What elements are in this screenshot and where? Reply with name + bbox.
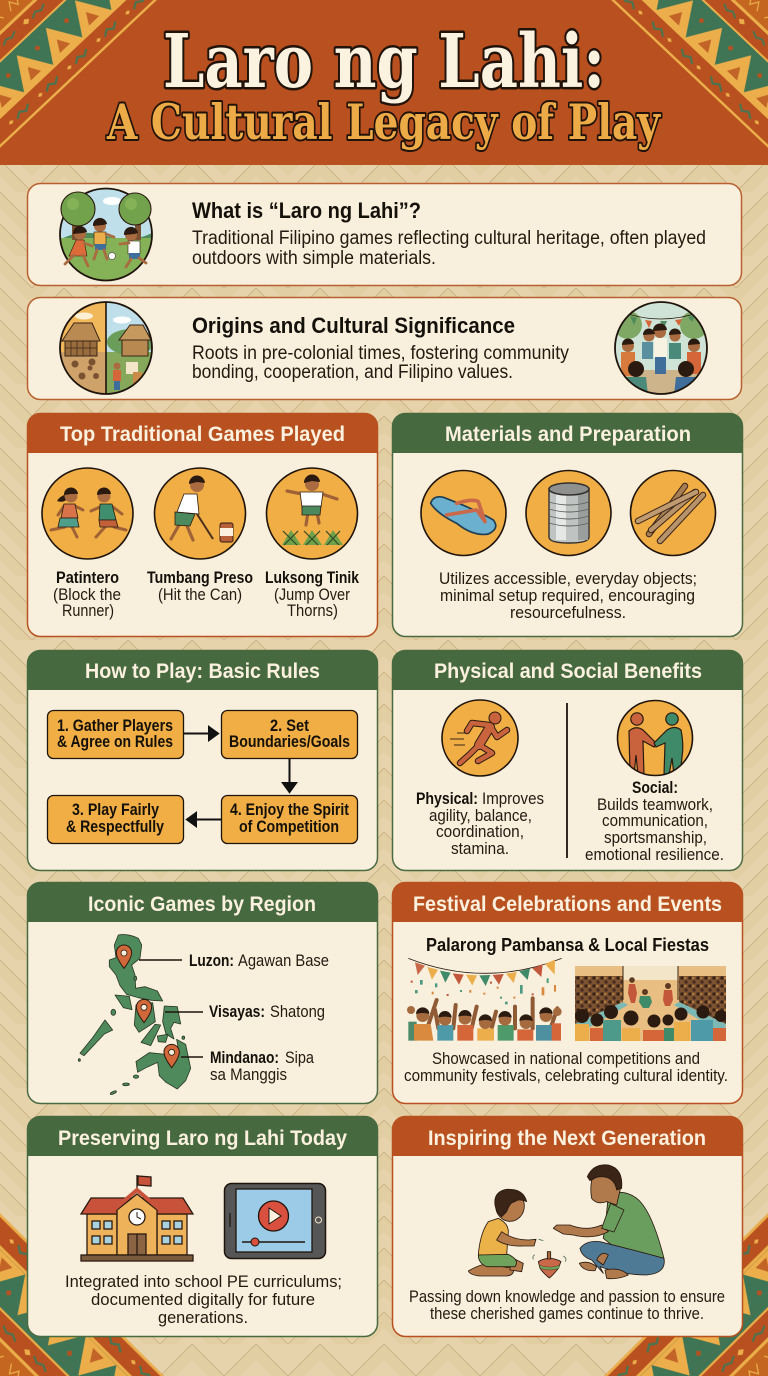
social benefits text bbox=[585, 779, 724, 864]
arrow: step 4 to 3 bbox=[187, 813, 221, 826]
social benefits text: sportsmanship, bbox=[604, 829, 707, 847]
body text: minimal setup required, encouraging bbox=[440, 587, 695, 605]
card: What is Laro ng Lahi bbox=[28, 184, 742, 286]
step 1: & Agree on Rules bbox=[57, 733, 173, 751]
body text bbox=[192, 343, 569, 383]
icon: sticks bbox=[630, 470, 716, 556]
top-right tribal corner bbox=[611, 0, 768, 148]
panel: iconic games by region bbox=[27, 882, 378, 1104]
panel: top traditional games bbox=[27, 413, 378, 636]
label: Mindanao: Mindanao: bbox=[210, 1049, 279, 1067]
label: Visayas: Visayas: bbox=[209, 1003, 265, 1021]
body text: Integrated into school PE curriculums; bbox=[65, 1273, 342, 1291]
subheading: Palarong Pambansa & Local Fiestas bbox=[426, 934, 709, 955]
panel heading: Materials and Preparation bbox=[445, 423, 691, 446]
physical benefits text: Physical: bbox=[416, 790, 478, 808]
panel heading: Inspiring the Next Generation bbox=[428, 1127, 706, 1150]
heading: Origins and Cultural Significance bbox=[192, 313, 515, 338]
body text: these cherished games continue to thrive. bbox=[430, 1305, 704, 1323]
panel: materials and preparation bbox=[392, 413, 743, 636]
step 2 bbox=[222, 710, 358, 758]
icon: village past and present bbox=[60, 302, 155, 394]
step 2: 2. Set bbox=[270, 717, 309, 735]
physical benefits text: stamina. bbox=[451, 840, 509, 858]
step 4: 4. Enjoy the Spirit bbox=[230, 801, 349, 819]
game labels: Luksong Tinik bbox=[265, 569, 360, 587]
top-left tribal corner bbox=[0, 0, 157, 148]
panel heading: Top Traditional Games Played bbox=[60, 423, 345, 446]
title: Laro ng Lahi: bbox=[163, 19, 605, 105]
label: Visayas bbox=[209, 1003, 325, 1021]
leader line: Visayas bbox=[165, 1011, 203, 1013]
icon: tablet with video bbox=[224, 1184, 326, 1258]
game labels: Tumbang Preso bbox=[147, 569, 253, 587]
icon: tin can bbox=[526, 470, 611, 556]
social benefits text: communication, bbox=[602, 812, 708, 830]
card: Origins and Cultural Significance bbox=[28, 298, 742, 400]
illustration: adult teaching child to spin a top bbox=[468, 1165, 664, 1279]
step 3: 3. Play Fairly bbox=[72, 801, 160, 819]
body text: Traditional Filipino games reflecting cultural heritage, often played bbox=[192, 228, 706, 249]
label: Visayas: Shatong bbox=[270, 1003, 325, 1021]
illustration: cheering crowd with bunting bbox=[407, 958, 562, 1041]
step 4: of Competition bbox=[239, 818, 339, 836]
leader line: Mindanao bbox=[181, 1056, 203, 1058]
game labels: (Block the bbox=[53, 586, 121, 604]
icon: tumbang preso bbox=[154, 468, 246, 559]
step 3 bbox=[48, 796, 184, 844]
label: Mindanao: Sipa bbox=[285, 1049, 315, 1067]
body text bbox=[192, 228, 706, 269]
step 3: & Respectfully bbox=[66, 818, 165, 836]
icon: children playing outdoors bbox=[58, 188, 154, 284]
panel: how to play bbox=[27, 650, 378, 870]
social benefits text: Social: bbox=[632, 779, 678, 797]
panel: physical and social benefits bbox=[392, 650, 743, 870]
icon: patintero bbox=[42, 468, 133, 559]
label: Luzon: Luzon: bbox=[189, 952, 234, 970]
physical benefits text: Improves bbox=[482, 790, 544, 808]
body text: Showcased in national competitions and bbox=[432, 1050, 700, 1068]
step 1: 1. Gather Players bbox=[57, 717, 173, 735]
step 1 bbox=[48, 710, 184, 758]
leader line: Luzon bbox=[139, 959, 182, 961]
icon: community gathering bbox=[614, 302, 708, 395]
panel: preserving today bbox=[27, 1116, 378, 1336]
game labels: Patintero bbox=[56, 569, 119, 587]
panel heading: Festival Celebrations and Events bbox=[413, 893, 722, 916]
physical benefits text bbox=[416, 790, 544, 858]
header banner bbox=[0, 0, 768, 165]
label: Luzon: Agawan Base bbox=[238, 952, 329, 970]
divider bbox=[566, 703, 568, 858]
panel heading: Iconic Games by Region bbox=[88, 893, 316, 916]
step 2: Boundaries/Goals bbox=[229, 733, 350, 751]
social benefits text: emotional resilience. bbox=[585, 846, 724, 864]
body text: documented digitally for future bbox=[91, 1291, 315, 1309]
icon: school bbox=[81, 1175, 193, 1261]
game labels: Thorns) bbox=[287, 602, 338, 620]
icon: luksong tinik bbox=[266, 468, 358, 559]
icon: runner bbox=[442, 700, 518, 776]
panel: festival celebrations bbox=[392, 882, 743, 1104]
panel heading: How to Play: Basic Rules bbox=[85, 660, 320, 683]
panel heading: Physical and Social Benefits bbox=[434, 660, 702, 683]
body text: generations. bbox=[158, 1309, 248, 1327]
label: Mindanao bbox=[210, 1049, 315, 1084]
physical benefits text: coordination, bbox=[436, 823, 524, 841]
bottom corner tribal pattern: left bbox=[0, 1213, 164, 1376]
heading: What is “Laro ng Lahi”? bbox=[192, 198, 421, 223]
panel: inspiring the next generation bbox=[392, 1116, 743, 1336]
body text: community festivals, celebrating cultural identity. bbox=[404, 1067, 728, 1085]
label: Mindanao: sa Manggis bbox=[210, 1066, 287, 1084]
label: Luzon bbox=[189, 952, 329, 970]
body text bbox=[439, 570, 697, 622]
arrow: step 1 to 2 bbox=[184, 727, 218, 740]
physical benefits text: agility, balance, bbox=[429, 807, 532, 825]
game labels bbox=[53, 569, 360, 620]
step 4 bbox=[222, 796, 358, 844]
social benefits text: Builds teamwork, bbox=[597, 796, 713, 814]
body text: resourcefulness. bbox=[510, 604, 626, 622]
body text: Passing down knowledge and passion to ensure bbox=[409, 1288, 725, 1306]
body text: outdoors with simple materials. bbox=[192, 248, 436, 269]
icon: slipper bbox=[421, 470, 506, 556]
map of the Philippines bbox=[78, 935, 191, 1095]
game labels: (Jump Over bbox=[274, 586, 350, 604]
body text: Utilizes accessible, everyday objects; bbox=[439, 570, 697, 588]
body text: Roots in pre-colonial times, fostering community bbox=[192, 343, 569, 364]
game labels: (Hit the Can) bbox=[158, 586, 242, 604]
arrow: step 2 to 4 bbox=[283, 759, 296, 792]
bottom corner tribal pattern: right bbox=[604, 1213, 768, 1376]
body text bbox=[404, 1050, 728, 1085]
illustration: stadium competition bbox=[575, 966, 727, 1041]
icon: handshake bbox=[618, 700, 692, 776]
body text bbox=[65, 1273, 342, 1327]
body text: bonding, cooperation, and Filipino values. bbox=[192, 362, 513, 383]
body text bbox=[409, 1288, 725, 1323]
panel heading: Preserving Laro ng Lahi Today bbox=[58, 1127, 347, 1150]
game labels: Runner) bbox=[62, 602, 114, 620]
